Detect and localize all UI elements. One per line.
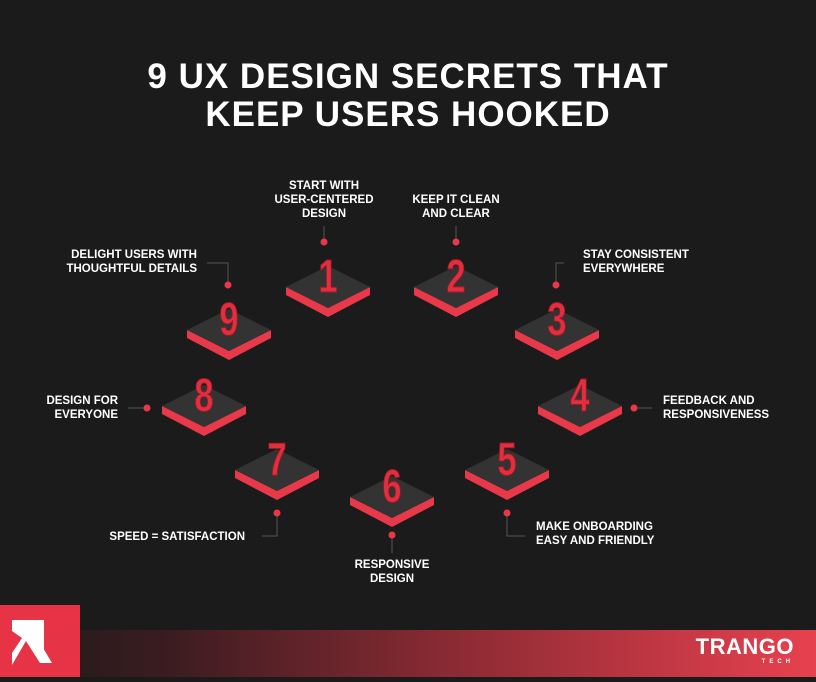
label 1: DESIGN <box>302 208 346 220</box>
label 4: FEEDBACK AND <box>663 395 755 407</box>
label 8 <box>46 395 150 421</box>
label 4: RESPONSIVENESS <box>663 409 769 421</box>
tile 1: 1 <box>318 250 338 302</box>
label 3 <box>552 249 689 288</box>
label 1: USER-CENTERED <box>274 194 374 206</box>
title: KEEP USERS HOOKED <box>205 95 611 134</box>
label 4 <box>630 395 769 421</box>
tile 2 <box>414 250 498 317</box>
label 1: START WITH <box>289 180 359 192</box>
logo icon <box>0 605 80 677</box>
label 9: DELIGHT USERS WITH <box>71 249 197 261</box>
tile 1 <box>286 250 370 317</box>
logo text: TRANGO <box>696 634 794 659</box>
label 6: RESPONSIVE <box>355 559 430 571</box>
tile 3 <box>515 293 599 360</box>
tile 2: 2 <box>446 250 466 302</box>
label 8: EVERYONE <box>55 409 118 421</box>
tile 5: 5 <box>497 433 517 485</box>
tile 5 <box>465 433 549 500</box>
tile 8 <box>162 369 246 436</box>
tile 7: 7 <box>267 433 287 485</box>
tile 8: 8 <box>194 369 214 421</box>
label 6 <box>355 532 430 585</box>
logo text: TECH <box>762 659 794 665</box>
label 1 <box>274 180 374 246</box>
label 5 <box>504 510 655 547</box>
label 9: THOUGHTFUL DETAILS <box>66 263 197 275</box>
label 7: SPEED = SATISFACTION <box>109 531 245 543</box>
label 3: STAY CONSISTENT <box>583 249 689 261</box>
label 8: DESIGN FOR <box>46 395 119 407</box>
label 7 <box>109 510 280 543</box>
label 9 <box>66 249 232 288</box>
tile 3: 3 <box>547 293 567 345</box>
tile 7 <box>235 433 319 500</box>
label 2 <box>412 194 500 246</box>
footer bar <box>0 630 816 677</box>
label 6: DESIGN <box>370 573 414 585</box>
label 3: EVERYWHERE <box>583 263 665 275</box>
tile 9 <box>187 293 271 360</box>
label 2: KEEP IT CLEAN <box>412 194 500 206</box>
label 5: MAKE ONBOARDING <box>536 521 653 533</box>
tile 6 <box>350 460 434 527</box>
tile 6: 6 <box>382 460 402 512</box>
tile 9: 9 <box>219 293 239 345</box>
tile 4 <box>538 369 622 436</box>
label 5: EASY AND FRIENDLY <box>536 535 655 547</box>
title <box>147 57 669 134</box>
title: 9 UX DESIGN SECRETS THAT <box>147 57 669 96</box>
tile 4: 4 <box>570 369 590 421</box>
label 2: AND CLEAR <box>422 208 491 220</box>
